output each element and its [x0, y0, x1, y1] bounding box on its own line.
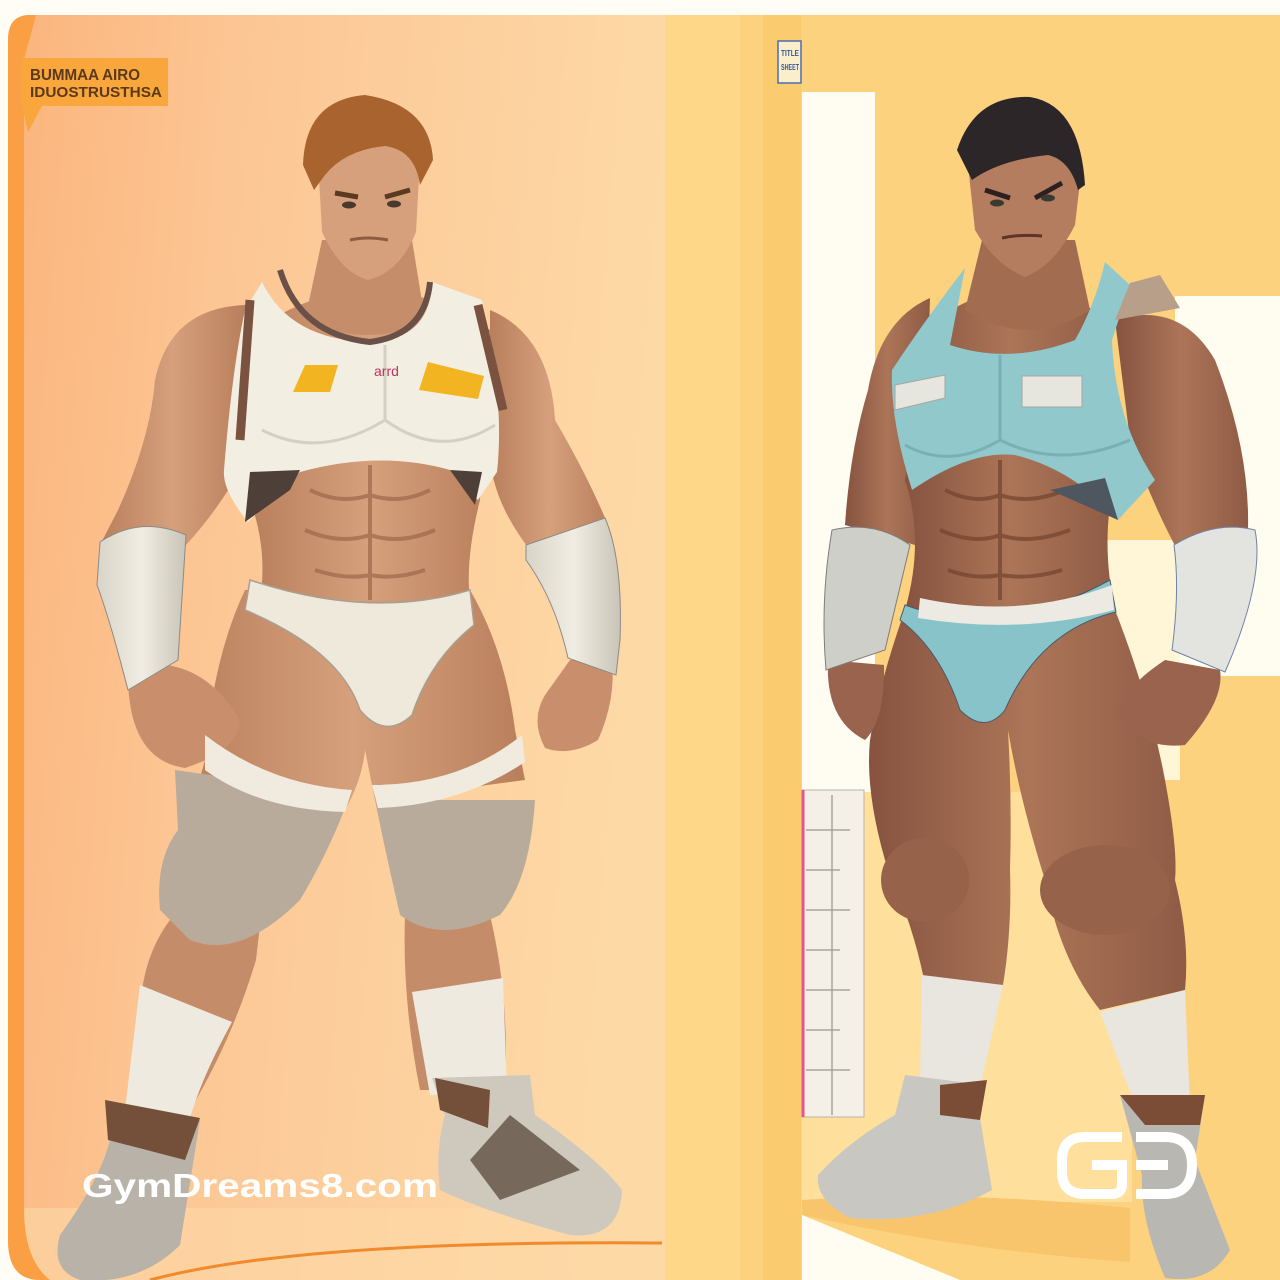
right character head: [957, 97, 1085, 277]
chart: height ruler: [802, 790, 864, 1117]
right character socks: [920, 975, 1190, 1105]
left character neck: [305, 240, 425, 335]
panel: right character sheet: [665, 15, 1280, 1280]
panel: left character sheet: [8, 15, 665, 1280]
left character head: [303, 95, 433, 280]
left character legs: [125, 590, 525, 1110]
left character white vest: [224, 270, 503, 522]
left character forearm wraps: [97, 518, 620, 690]
tag: top left heading label: BUMMAA AIRO: [30, 67, 140, 84]
tag: top left heading label: IDUOSTRUSTHSA: [30, 84, 162, 101]
left character knee wraps: [159, 735, 535, 945]
right character legs: [869, 610, 1186, 1010]
tag: top right blue label: SHEET: [781, 63, 799, 72]
left character white vest: arrd: [374, 363, 399, 379]
right character arms: [828, 298, 1248, 746]
tag: top right blue label: [778, 41, 801, 83]
left character shoes: [58, 1075, 622, 1280]
right character torso: [905, 290, 1115, 610]
tag: top left heading label: [22, 58, 168, 132]
right character abs: [940, 460, 1070, 600]
right character waistband: [918, 585, 1114, 625]
right character forearm wraps: [824, 527, 1257, 672]
left character socks: [125, 978, 507, 1125]
left character abs: [305, 465, 435, 600]
left character briefs: [245, 580, 474, 726]
tag: top right blue label: TITLE: [781, 49, 800, 58]
figure: right character: [818, 97, 1257, 1279]
right character briefs: [900, 580, 1116, 722]
left character torso: [250, 290, 490, 600]
figure: left character: [58, 95, 622, 1280]
watermark: website name: GymDreams8.com: [82, 1167, 438, 1204]
right character knee fur: [881, 838, 1170, 935]
right character shoes: [818, 1075, 1230, 1279]
left character arms: [100, 305, 613, 768]
right character neck: [965, 240, 1090, 330]
logo: GD monogram: [1062, 1137, 1192, 1194]
right character blue vest: [892, 262, 1180, 520]
